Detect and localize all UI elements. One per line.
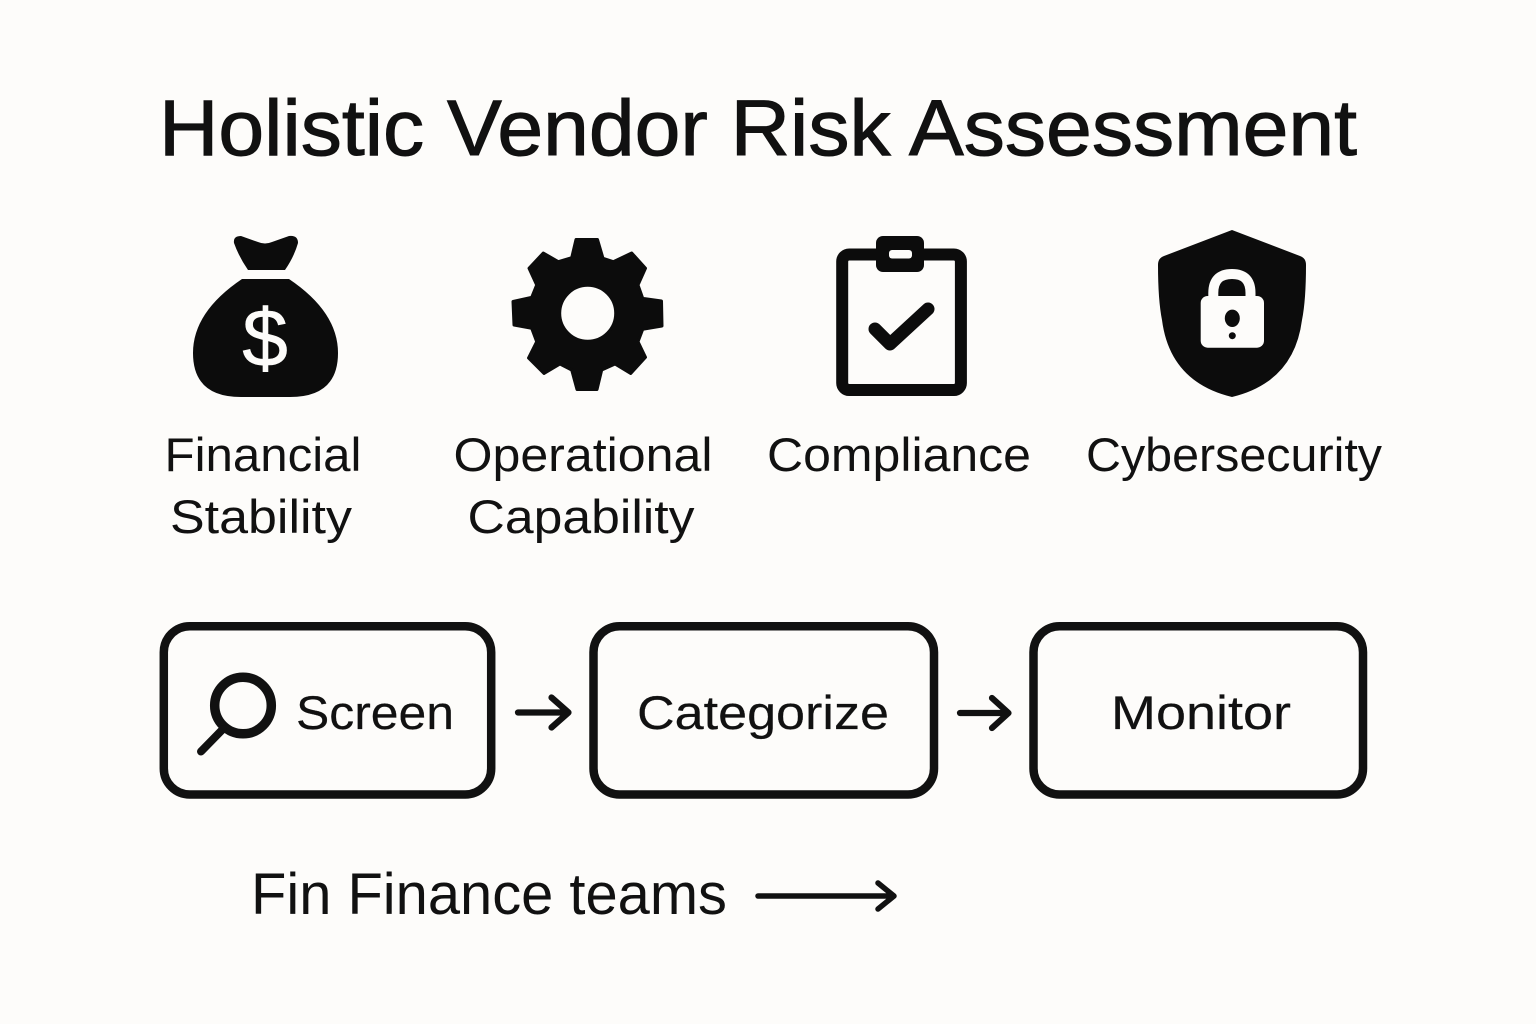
label: Financial Stability: Financial — [164, 428, 362, 481]
icon: money bag — [193, 236, 338, 397]
arrow: finance teams — [758, 883, 894, 909]
step: Categorize — [594, 626, 934, 794]
icon: shield with lock — [1158, 230, 1306, 397]
step: Monitor: Monitor — [1111, 686, 1291, 739]
icon: gear — [513, 240, 662, 390]
step: Categorize: Categorize — [637, 686, 889, 739]
label: Operational Capability: Operational — [454, 428, 712, 481]
icon: magnifying glass — [201, 677, 271, 752]
step: Monitor — [1034, 626, 1363, 794]
label: Cybersecurity: Cybersecurity — [1086, 428, 1383, 481]
step: Screen — [164, 626, 491, 794]
arrow: Screen to Categorize — [518, 698, 568, 728]
arrow: Categorize to Monitor — [960, 698, 1008, 728]
label: Financial Stability: Stability — [170, 490, 353, 543]
step: Screen: Screen — [296, 686, 454, 739]
label: Operational Capability — [454, 428, 712, 543]
icon: clipboard with check — [842, 236, 961, 390]
label: Financial Stability — [164, 428, 362, 543]
title: Holistic Vendor Risk Assessment — [159, 83, 1357, 172]
label: Operational Capability: Capability — [468, 490, 695, 543]
caption: Fin Finance teams: Fin Finance teams — [251, 862, 727, 927]
icon: money bag: $ — [242, 293, 288, 384]
label: Compliance: Compliance — [767, 428, 1031, 481]
